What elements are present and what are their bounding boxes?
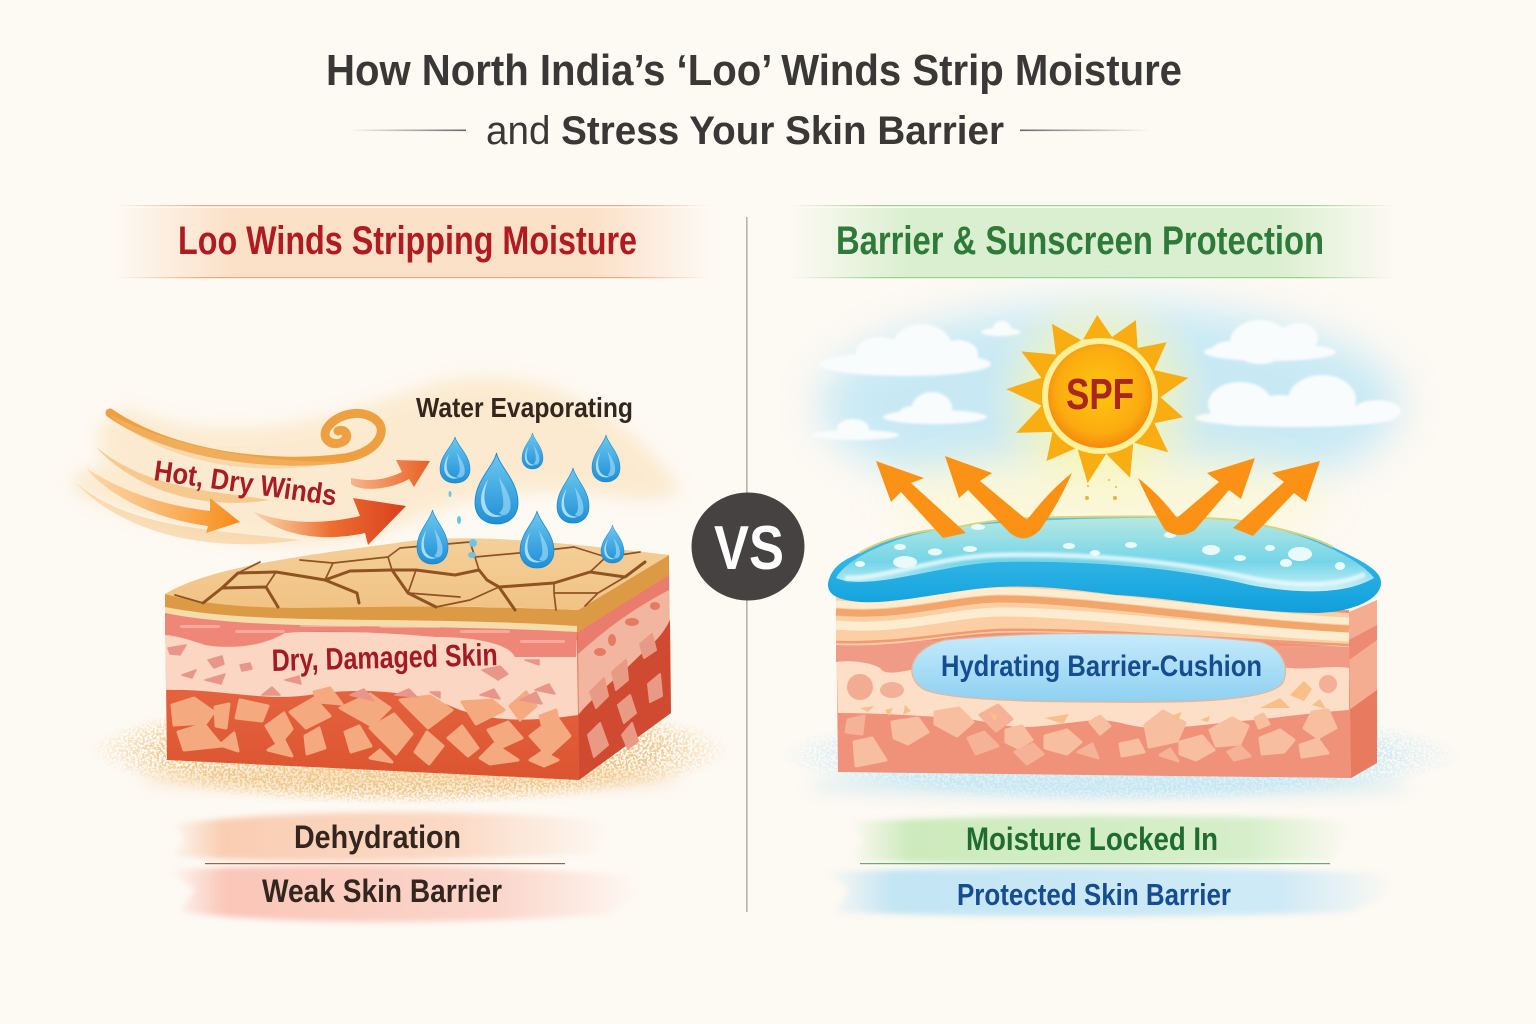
- VS badge: VS: [714, 514, 784, 583]
- sand ground right: [780, 707, 1460, 803]
- peach layer: [836, 640, 1349, 728]
- arrows: reflected rays: [876, 456, 1320, 538]
- panel: left heading: [115, 205, 710, 278]
- label: dehydration: Dehydration: [294, 819, 461, 855]
- label: weak skin barrier: Weak Skin Barrier: [262, 873, 502, 909]
- front face base: [836, 600, 1351, 778]
- sky: [820, 305, 1400, 550]
- cloud: [981, 321, 1021, 336]
- droplet large: [475, 453, 518, 524]
- centre divider: [746, 217, 748, 912]
- arrow: [945, 456, 1072, 538]
- water droplets: [417, 433, 624, 568]
- gel bubbles: [855, 524, 1345, 570]
- hydrating barrier cushion: Hydrating Barrier-Cushion: [941, 650, 1262, 683]
- label: hot dry winds: Hot, Dry Winds: [152, 455, 339, 513]
- arrow: small upward wind: [351, 460, 430, 489]
- dry skin block: [165, 538, 671, 780]
- stones in lower layer: [172, 688, 570, 766]
- right side face: [576, 560, 671, 780]
- panel: right heading: [790, 205, 1395, 278]
- label: moisture locked in: Moisture Locked In: [966, 821, 1218, 857]
- specks under sun: [1085, 479, 1117, 500]
- side face: [1349, 600, 1377, 778]
- droplet: [520, 511, 554, 568]
- protected skin block: [836, 583, 1377, 778]
- upper layers: [836, 583, 1349, 647]
- wind swoosh with spiral: [110, 413, 381, 461]
- arrow: orange wind: [86, 468, 240, 533]
- droplet: [417, 510, 448, 564]
- droplet: [592, 435, 620, 482]
- title: How North India’s ‘Loo’ Winds Strip Moisture: [326, 46, 1182, 95]
- droplet: [601, 525, 624, 563]
- VS badge: [692, 492, 804, 600]
- panel: right heading: Barrier & Sunscreen Protection: [836, 219, 1324, 263]
- specks in dermis: [168, 645, 555, 704]
- specks in dermis: [847, 674, 1337, 724]
- gel layer: [828, 516, 1381, 613]
- surface cracks: [175, 542, 645, 610]
- panel: right illustration: [780, 285, 1460, 803]
- hot wind haze: [73, 378, 680, 544]
- orange top rim: [165, 555, 669, 632]
- arrow: [1233, 461, 1320, 536]
- cloud: [1204, 320, 1336, 364]
- icon: SPF sun: [1005, 314, 1191, 485]
- hydrating barrier cushion: [912, 633, 1286, 702]
- cracked skin surface: [165, 538, 669, 610]
- band: moisture locked in: [850, 816, 1350, 864]
- panel: right summary labels: [825, 816, 1395, 916]
- band: dehydration: [170, 812, 610, 861]
- label: protected skin barrier: Protected Skin Barrier: [957, 877, 1231, 912]
- cloud: [883, 392, 987, 424]
- faded wind streaks: [75, 415, 340, 544]
- front face base: [165, 610, 579, 780]
- title: and Stress Your Skin Barrier: [486, 109, 1004, 153]
- band: weak skin barrier: [170, 865, 640, 922]
- peach dermis layer: [165, 622, 578, 720]
- label: water evaporating: Water Evaporating: [416, 392, 633, 423]
- sun glow: [985, 285, 1215, 515]
- droplet: [557, 468, 589, 523]
- band: protected skin barrier: [825, 868, 1395, 916]
- arrow: [1138, 458, 1255, 535]
- panel: left heading: Loo Winds Stripping Moisture: [178, 219, 637, 263]
- cloud: [1195, 375, 1401, 427]
- droplet: [440, 437, 470, 483]
- clouds: [811, 320, 1401, 440]
- sand ground left: [90, 695, 730, 805]
- sun rays: [1005, 314, 1191, 485]
- panel: left summary labels: [170, 812, 640, 922]
- tiny droplets: [448, 491, 477, 558]
- arrow: red wind: [254, 498, 406, 545]
- panel: left illustration: [73, 378, 730, 805]
- droplet: [522, 433, 543, 469]
- label: dry damaged skin: Dry, Damaged Skin: [271, 637, 498, 678]
- stones in lower layer: [846, 705, 1336, 766]
- cloud: [811, 419, 899, 440]
- cloud: [819, 324, 991, 376]
- arrow: [876, 461, 966, 538]
- title: [326, 46, 1182, 153]
- pink band: [836, 640, 1349, 673]
- pink band: [165, 612, 577, 657]
- icon: SPF sun: SPF: [1066, 370, 1134, 419]
